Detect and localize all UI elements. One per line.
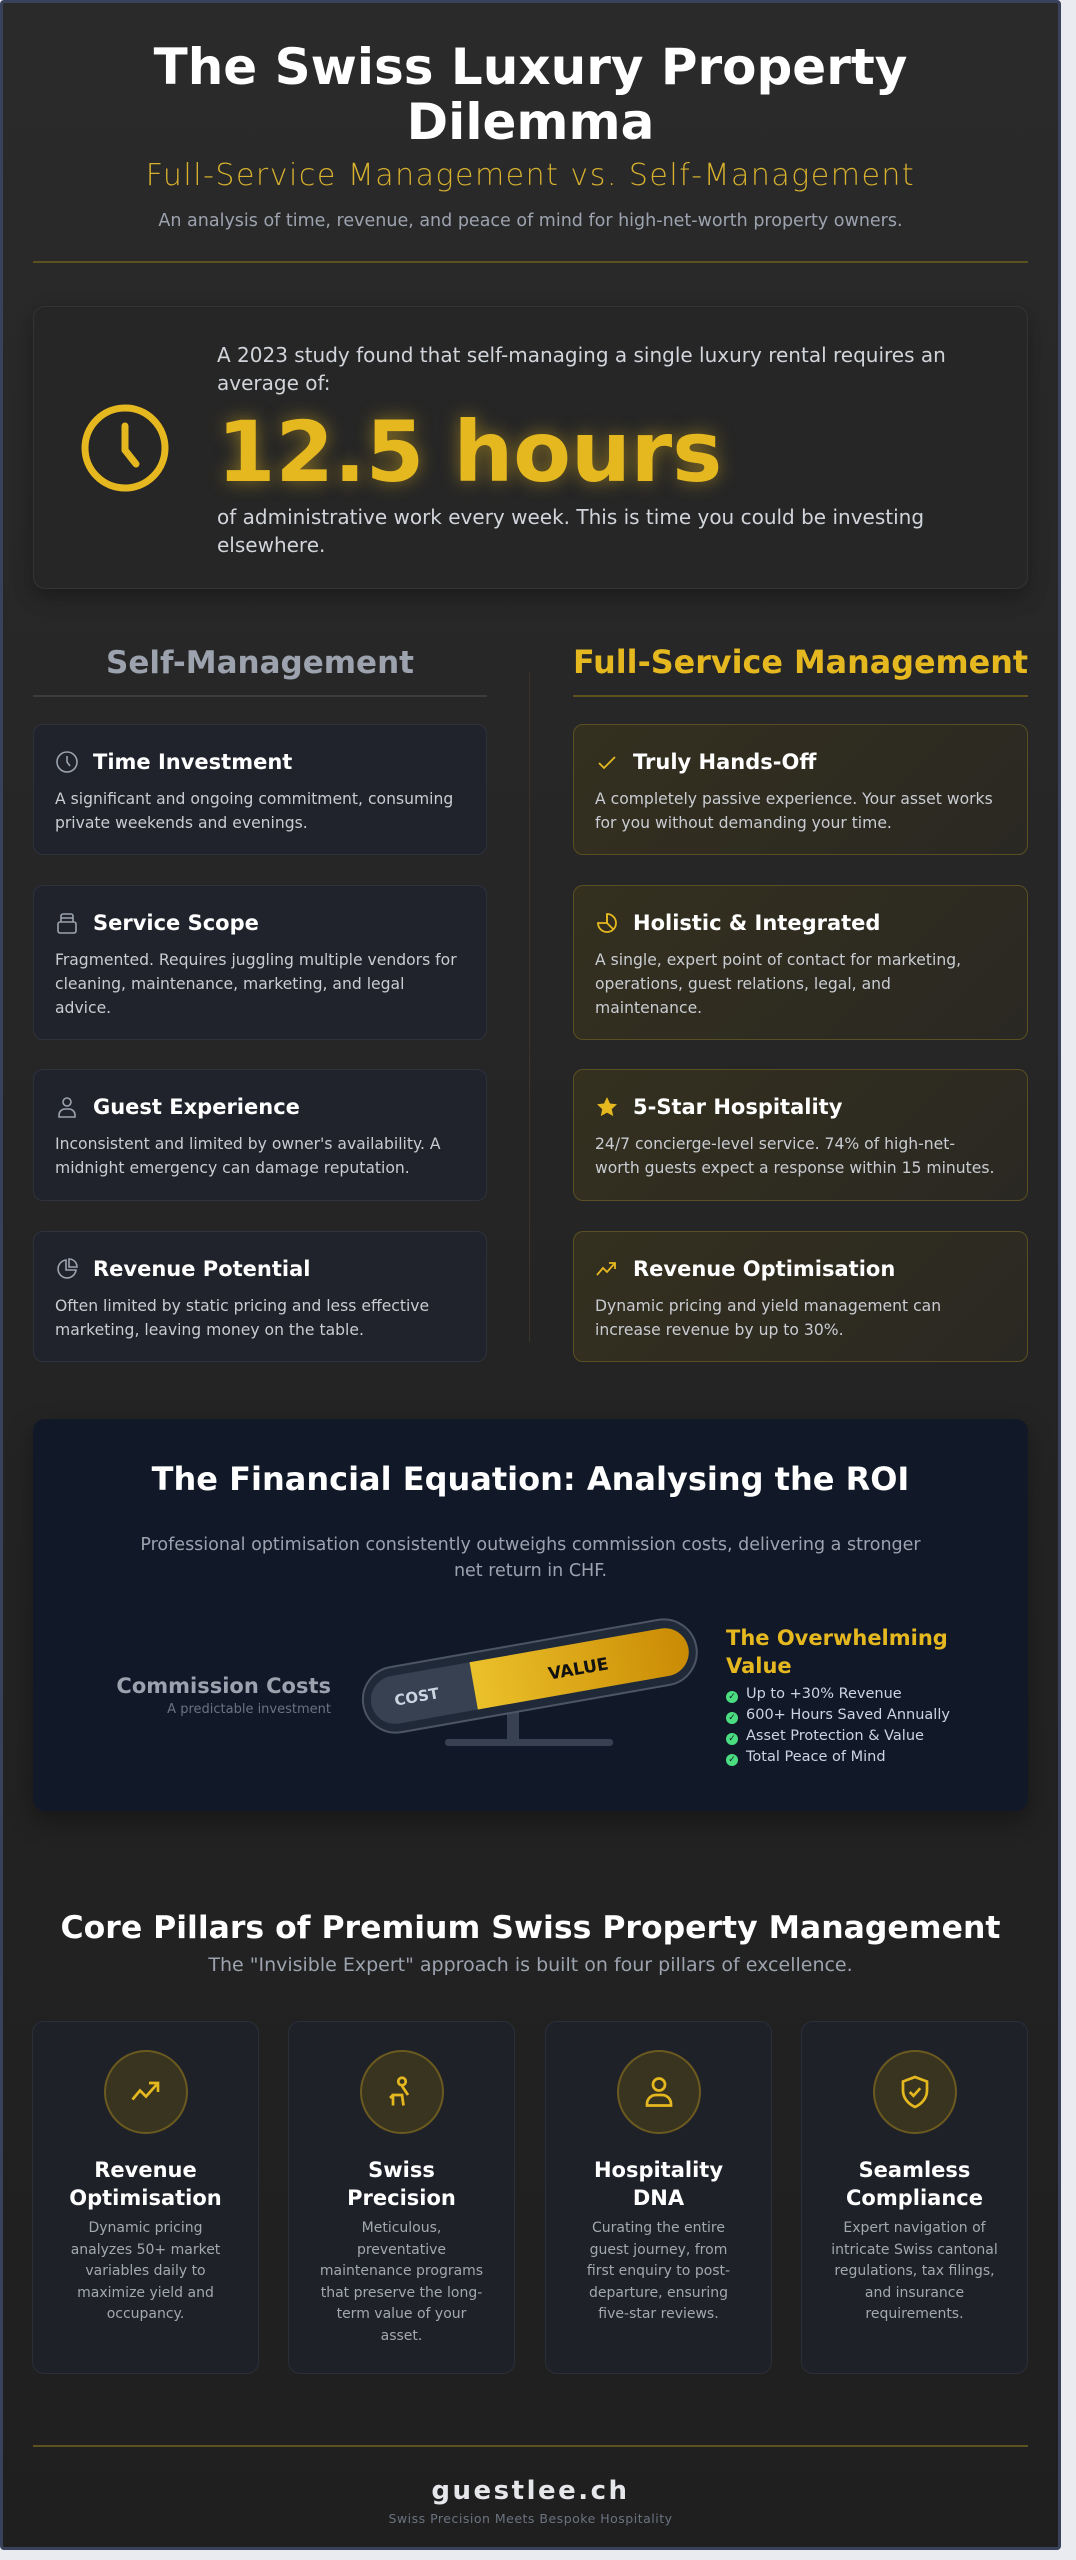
card: truly hands-off: Truly Hands-Off [633, 750, 816, 774]
card: service scope: Service Scope [93, 911, 259, 935]
financial title: The Financial Equation: Analysing the ROI [152, 1460, 909, 1498]
card: guest experience: Inconsistent and limited by owner's availability. A midnight emergency can damage reputation. [55, 1135, 441, 1177]
footer brand: guestlee.ch [431, 2476, 630, 2506]
panel: financial equation [33, 1419, 1028, 1811]
seesaw chart: VALUE [547, 1654, 610, 1685]
stat text: of administrative work every week. This is time you could be investing elsewhere. [217, 505, 924, 557]
value list: ✓ [728, 1692, 736, 1702]
value list: Total Peace of Mind [746, 1749, 886, 1765]
footer tagline: Swiss Precision Meets Bespoke Hospitality [388, 2511, 673, 2526]
pillar: hospitality dna [545, 2021, 772, 2374]
pillar: hospitality dna: Curating the entire guest journey, from first enquiry to post-departure, ensuring five-star reviews. [587, 2220, 730, 2322]
stat text: A 2023 study found that self-managing a single luxury rental requires an average of: [217, 343, 946, 395]
title [154, 38, 907, 151]
card: service scope: advice. [55, 999, 111, 1017]
pillar: swiss precision: Swiss Precision [347, 2158, 456, 2210]
value list: Up to +30% Revenue [746, 1686, 902, 1702]
card: holistic [573, 885, 1028, 1040]
pillar: seamless compliance: Seamless Compliance [846, 2158, 983, 2210]
card: time investment: Time Investment [93, 750, 292, 774]
card: 5-star [573, 1069, 1028, 1201]
commission costs label [116, 1674, 331, 1717]
card: 5-star: 5-Star Hospitality [633, 1095, 842, 1119]
card: revenue potential: Revenue Potential [93, 1257, 310, 1281]
value list: ✓ [728, 1734, 736, 1744]
card: revenue potential [33, 1231, 487, 1362]
pillar: hospitality dna: Hospitality DNA [594, 2158, 723, 2210]
commission costs label: Commission Costs [116, 1674, 331, 1698]
pillar: revenue optimisation: Revenue Optimisation [69, 2158, 222, 2210]
financial subtitle: Professional optimisation consistently outweighs commission costs, delivering a stronger net return in CHF. [140, 1535, 921, 1581]
card: revenue optimisation [573, 1231, 1028, 1362]
card: revenue potential: Often limited by static pricing and less effective marketing, leaving money on the table. [55, 1297, 429, 1339]
value list: The Overwhelming Value [726, 1626, 948, 1678]
icon: clock [82, 404, 168, 492]
card: 5-star: 24/7 concierge-level service. 74% of high-net- [595, 1135, 955, 1153]
pillar: seamless compliance: Expert navigation of intricate Swiss cantonal regulations, tax filings, and insurance requirements. [831, 2220, 998, 2322]
card: guest experience [33, 1069, 487, 1201]
card: service scope [33, 885, 487, 1040]
card: holistic: maintenance. [595, 999, 702, 1017]
seesaw chart [362, 1618, 698, 1746]
commission costs label: A predictable investment [167, 1702, 331, 1717]
card: revenue optimisation: Revenue Optimisation [633, 1257, 895, 1281]
stat card [33, 306, 1028, 589]
pillars subtitle: The "Invisible Expert" approach is built on four pillars of excellence. [208, 1954, 853, 1976]
card: 5-star: worth guests expect a response within 15 minutes. [595, 1159, 994, 1177]
card: truly hands-off [573, 724, 1028, 855]
title: The Swiss Luxury Property [154, 38, 907, 96]
pillar: swiss precision [288, 2021, 515, 2374]
tagline: An analysis of time, revenue, and peace of mind for high-net-worth property owners. [158, 211, 903, 231]
pillar: swiss precision: Meticulous, preventative maintenance programs that preserve the long-term value of your asset. [320, 2220, 483, 2344]
card: revenue optimisation: Dynamic pricing and yield management can increase revenue by up to 30%. [595, 1297, 941, 1339]
card: holistic: A single, expert point of contact for marketing, operations, guest relations, legal, and [595, 951, 961, 993]
stat text [217, 343, 946, 557]
card: holistic: Holistic & Integrated [633, 911, 880, 935]
card: guest experience: Guest Experience [93, 1095, 300, 1119]
title: Dilemma [407, 93, 654, 151]
card: time investment [33, 724, 487, 855]
value list: ✓ [728, 1713, 736, 1723]
value list [726, 1626, 950, 1766]
pillar: revenue optimisation [32, 2021, 259, 2374]
value list: Asset Protection & Value [746, 1728, 924, 1744]
card: time investment: A significant and ongoing commitment, consuming private weekends and evenings. [55, 790, 453, 832]
value list: ✓ [728, 1755, 736, 1765]
pillar: revenue optimisation: Dynamic pricing analyzes 50+ market variables daily to maximize yield and occupancy. [71, 2220, 220, 2322]
seesaw chart: COST [393, 1684, 441, 1710]
card: truly hands-off: A completely passive experience. Your asset works for you without demanding your time. [595, 790, 993, 832]
pillars title: Core Pillars of Premium Swiss Property Management [61, 1910, 1000, 1946]
heading: self-management: Self-Management [106, 645, 414, 681]
value list: 600+ Hours Saved Annually [746, 1707, 950, 1723]
pillar: seamless compliance [801, 2021, 1028, 2374]
subtitle: Full-Service Management vs. Self-Management [146, 158, 915, 193]
heading: full-service: Full-Service Management [573, 644, 1028, 681]
stat text: 12.5 hours [217, 403, 722, 501]
card: service scope: Fragmented. Requires juggling multiple vendors for cleaning, maintenance, marketing, and legal [55, 951, 457, 993]
